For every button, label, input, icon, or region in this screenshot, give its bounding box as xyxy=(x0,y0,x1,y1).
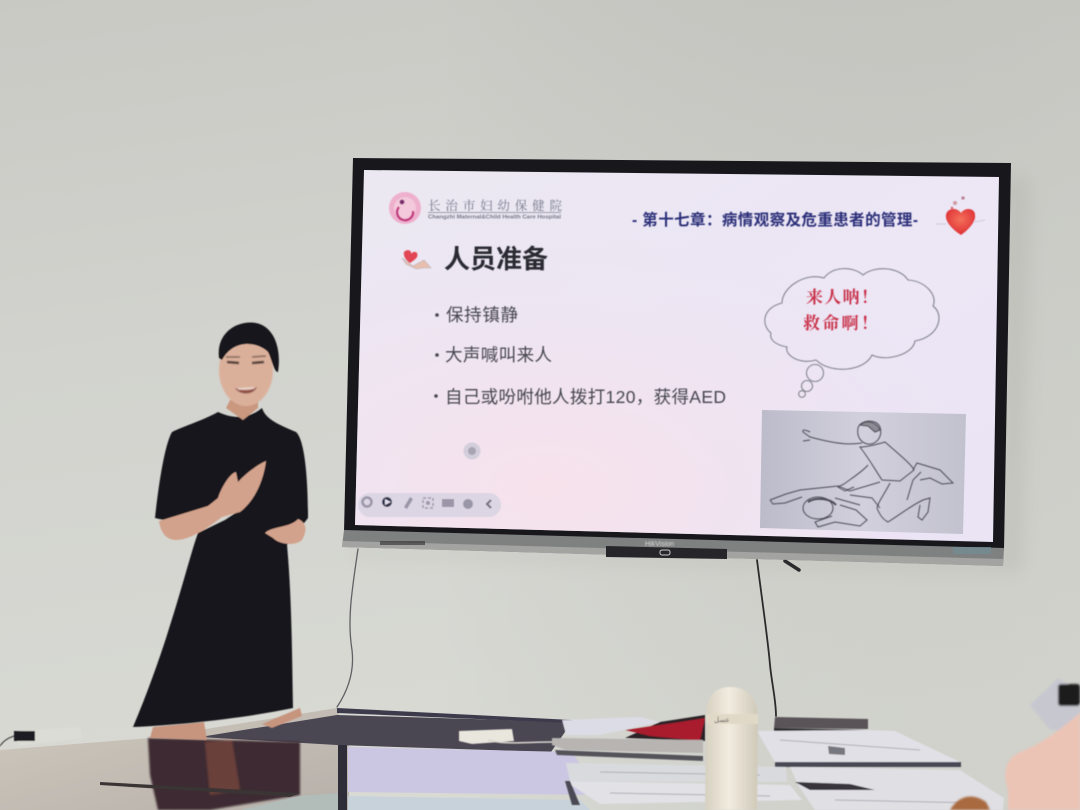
rescuer figure xyxy=(803,421,953,522)
papers near laptop xyxy=(562,717,660,735)
icon: hand holding heart xyxy=(402,250,431,269)
presenter xyxy=(133,323,308,727)
black device xyxy=(774,717,868,734)
presenter dress xyxy=(133,408,308,727)
casualty figure xyxy=(770,482,880,527)
table left reflection xyxy=(0,708,349,810)
right documents xyxy=(790,767,1004,810)
presenter hair xyxy=(219,323,279,372)
pointer dot xyxy=(464,442,480,460)
bullet list: 保持镇静 xyxy=(446,305,518,325)
hospital logo: Changzhi Maternal&Child Health Care Hospital xyxy=(428,214,562,220)
presenter right hand xyxy=(265,519,305,544)
laptop xyxy=(552,738,703,761)
desk items xyxy=(459,715,1004,810)
stack of documents right xyxy=(757,730,961,767)
bullet list: 大声喊叫来人 xyxy=(445,345,552,365)
table xyxy=(0,708,600,810)
presenter legs above table xyxy=(150,708,302,740)
presentation toolbar xyxy=(358,493,501,517)
phone and blurred hand xyxy=(950,678,1080,810)
display lower bar: HikVision xyxy=(645,541,674,548)
red patterned notebook xyxy=(625,715,705,741)
slide title: 人员准备 xyxy=(444,244,548,274)
presenter neck xyxy=(226,398,258,420)
slide surface xyxy=(355,170,999,542)
presenter forearm and hand xyxy=(159,461,266,540)
icon: heart top right xyxy=(936,196,985,235)
bubble text: 救命啊！ xyxy=(803,313,878,333)
table dark reflection xyxy=(200,715,572,752)
lower documents xyxy=(565,763,802,805)
water bottle xyxy=(705,687,758,810)
hospital logo xyxy=(389,192,562,224)
paper writing lines xyxy=(600,740,980,803)
chapter heading: - 第十七章：病情观察及危重患者的管理- xyxy=(632,210,918,229)
display lower bar xyxy=(342,530,1004,566)
reflection of presenter xyxy=(148,738,300,810)
water bottle: ﻋﺴﻞ xyxy=(714,716,730,724)
hospital name: 长治市妇幼保健院 xyxy=(428,198,562,213)
bullet list: 自己或吩咐他人拨打120，获得AED xyxy=(445,387,726,407)
speech bubble cloud xyxy=(765,269,939,397)
cables under the display xyxy=(337,549,799,716)
screen reflection on table xyxy=(348,747,600,795)
wall display xyxy=(342,158,1011,566)
presenter face xyxy=(219,334,273,406)
power adapter xyxy=(459,729,552,744)
bubble text: 来人呐！ xyxy=(806,287,878,307)
wall socket xyxy=(0,727,82,746)
display bezel xyxy=(344,158,1011,550)
bullet list xyxy=(434,305,726,407)
bubble text xyxy=(803,287,878,333)
rescue illustration xyxy=(760,410,966,534)
